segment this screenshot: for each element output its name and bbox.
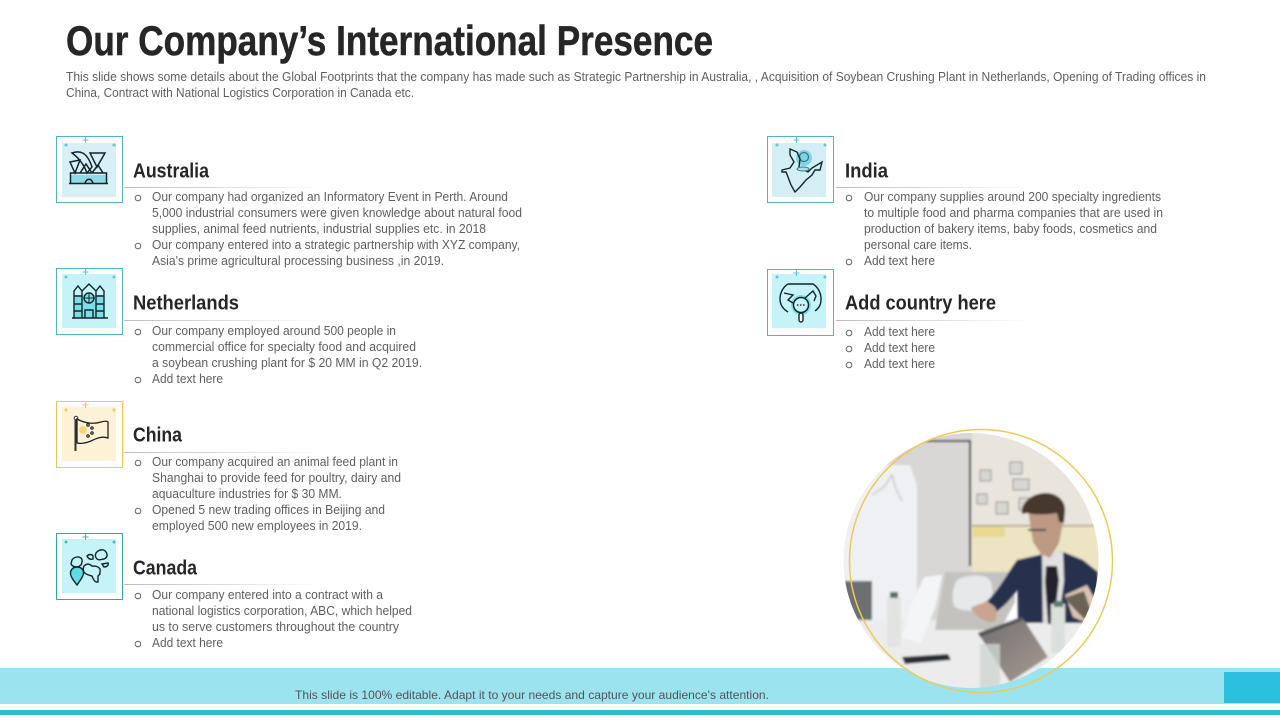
bullet list: Netherlands: Our company employed around 500 people in (152, 323, 396, 338)
icon: India map (768, 136, 834, 202)
bullet list: Netherlands: a soybean crushing plant for $ 20 MM in Q2 2019. (152, 355, 422, 370)
bullet list: Canada (135, 587, 412, 650)
subtitle (66, 69, 1206, 100)
heading: China: China (133, 424, 183, 446)
bullet list: India (846, 189, 1163, 268)
subtitle: China, Contract with National Logistics Corporation in Canada etc. (66, 85, 414, 100)
bullet list: India: personal care items. (864, 237, 972, 252)
panel: India (768, 136, 1163, 268)
panel: Australia (56, 136, 522, 268)
heading: Australia: Australia (133, 160, 210, 182)
bullet list: India: Our company supplies around 200 specialty ingredients (864, 189, 1161, 204)
bullet list: China (135, 454, 401, 533)
bullet list: Netherlands (135, 323, 422, 386)
bullet list: China: employed 500 new employees in 2019. (152, 518, 362, 533)
bullet list: India: production of bakery items, baby foods, cosmetics and (864, 221, 1157, 236)
bullet list: India: Add text here (864, 253, 935, 268)
bullet list: Netherlands: Add text here (152, 371, 223, 386)
bullet list: Australia: Our company had organized an Informatory Event in Perth. Around (152, 189, 508, 204)
bullet list: Netherlands: commercial office for specialty food and acquired (152, 339, 416, 354)
bullet list: Canada: us to serve customers throughout the country (152, 619, 399, 634)
bullet list: Add country: Add text here (864, 340, 935, 355)
photo: businessman in meeting room (844, 433, 1098, 688)
bullet list: Australia (135, 189, 522, 268)
bullet list: China: aquaculture industries for $ 30 MM. (152, 486, 342, 501)
bullet list: Australia: Our company entered into a strategic partnership with XYZ company, (152, 237, 520, 252)
icon: globe with magnifier (768, 270, 834, 336)
panel: Add country (768, 270, 1032, 371)
panel: Canada (56, 534, 412, 650)
bullet list: Canada: national logistics corporation, ABC, which helped (152, 603, 412, 618)
icon: flag (56, 402, 122, 468)
footer band (0, 668, 1280, 715)
bullet list: Add country: Add text here (864, 356, 935, 371)
panel: China (56, 402, 401, 533)
panel: Netherlands (56, 268, 422, 386)
title: Our Company’s International Presence (66, 17, 713, 64)
bullet list: Australia: Asia's prime agricultural processing business ,in 2019. (152, 253, 444, 268)
bullet list: Australia: supplies, animal feed nutrients, industrial supplies etc. in 2018 (152, 221, 486, 236)
heading: Netherlands: Netherlands (133, 292, 239, 314)
heading: Add country here: Add country here (845, 292, 996, 314)
bullet list: Add country (846, 324, 935, 371)
subtitle: This slide shows some details about the Global Footprints that the company has made such as Strategic Partnership in Australia, , Acquisition of Soybean Crushing Plant in Netherlands, Opening of Trading offices in (66, 69, 1206, 84)
bullet list: Australia: 5,000 industrial consumers were given knowledge about natural food (152, 205, 522, 220)
icon: opera house (56, 136, 122, 202)
icon: building (56, 268, 122, 334)
bullet list: Canada: Add text here (152, 635, 223, 650)
bullet list: China: Shanghai to provide feed for poultry, dairy and (152, 470, 401, 485)
bullet list: China: Our company acquired an animal feed plant in (152, 454, 398, 469)
icon: map pin (56, 534, 122, 600)
bullet list: Canada: Our company entered into a contract with a (152, 587, 384, 602)
heading: Canada: Canada (133, 556, 198, 580)
bullet list: China: Opened 5 new trading offices in Beijing and (152, 502, 385, 517)
footer note: This slide is 100% editable. Adapt it to your needs and capture your audience's attention. (295, 688, 769, 702)
bullet list: Add country: Add text here (864, 324, 935, 339)
bullet list: India: to multiple food and pharma companies that are used in (864, 205, 1163, 220)
ring: yellow outline (850, 430, 1112, 692)
heading: India: India (845, 160, 889, 182)
